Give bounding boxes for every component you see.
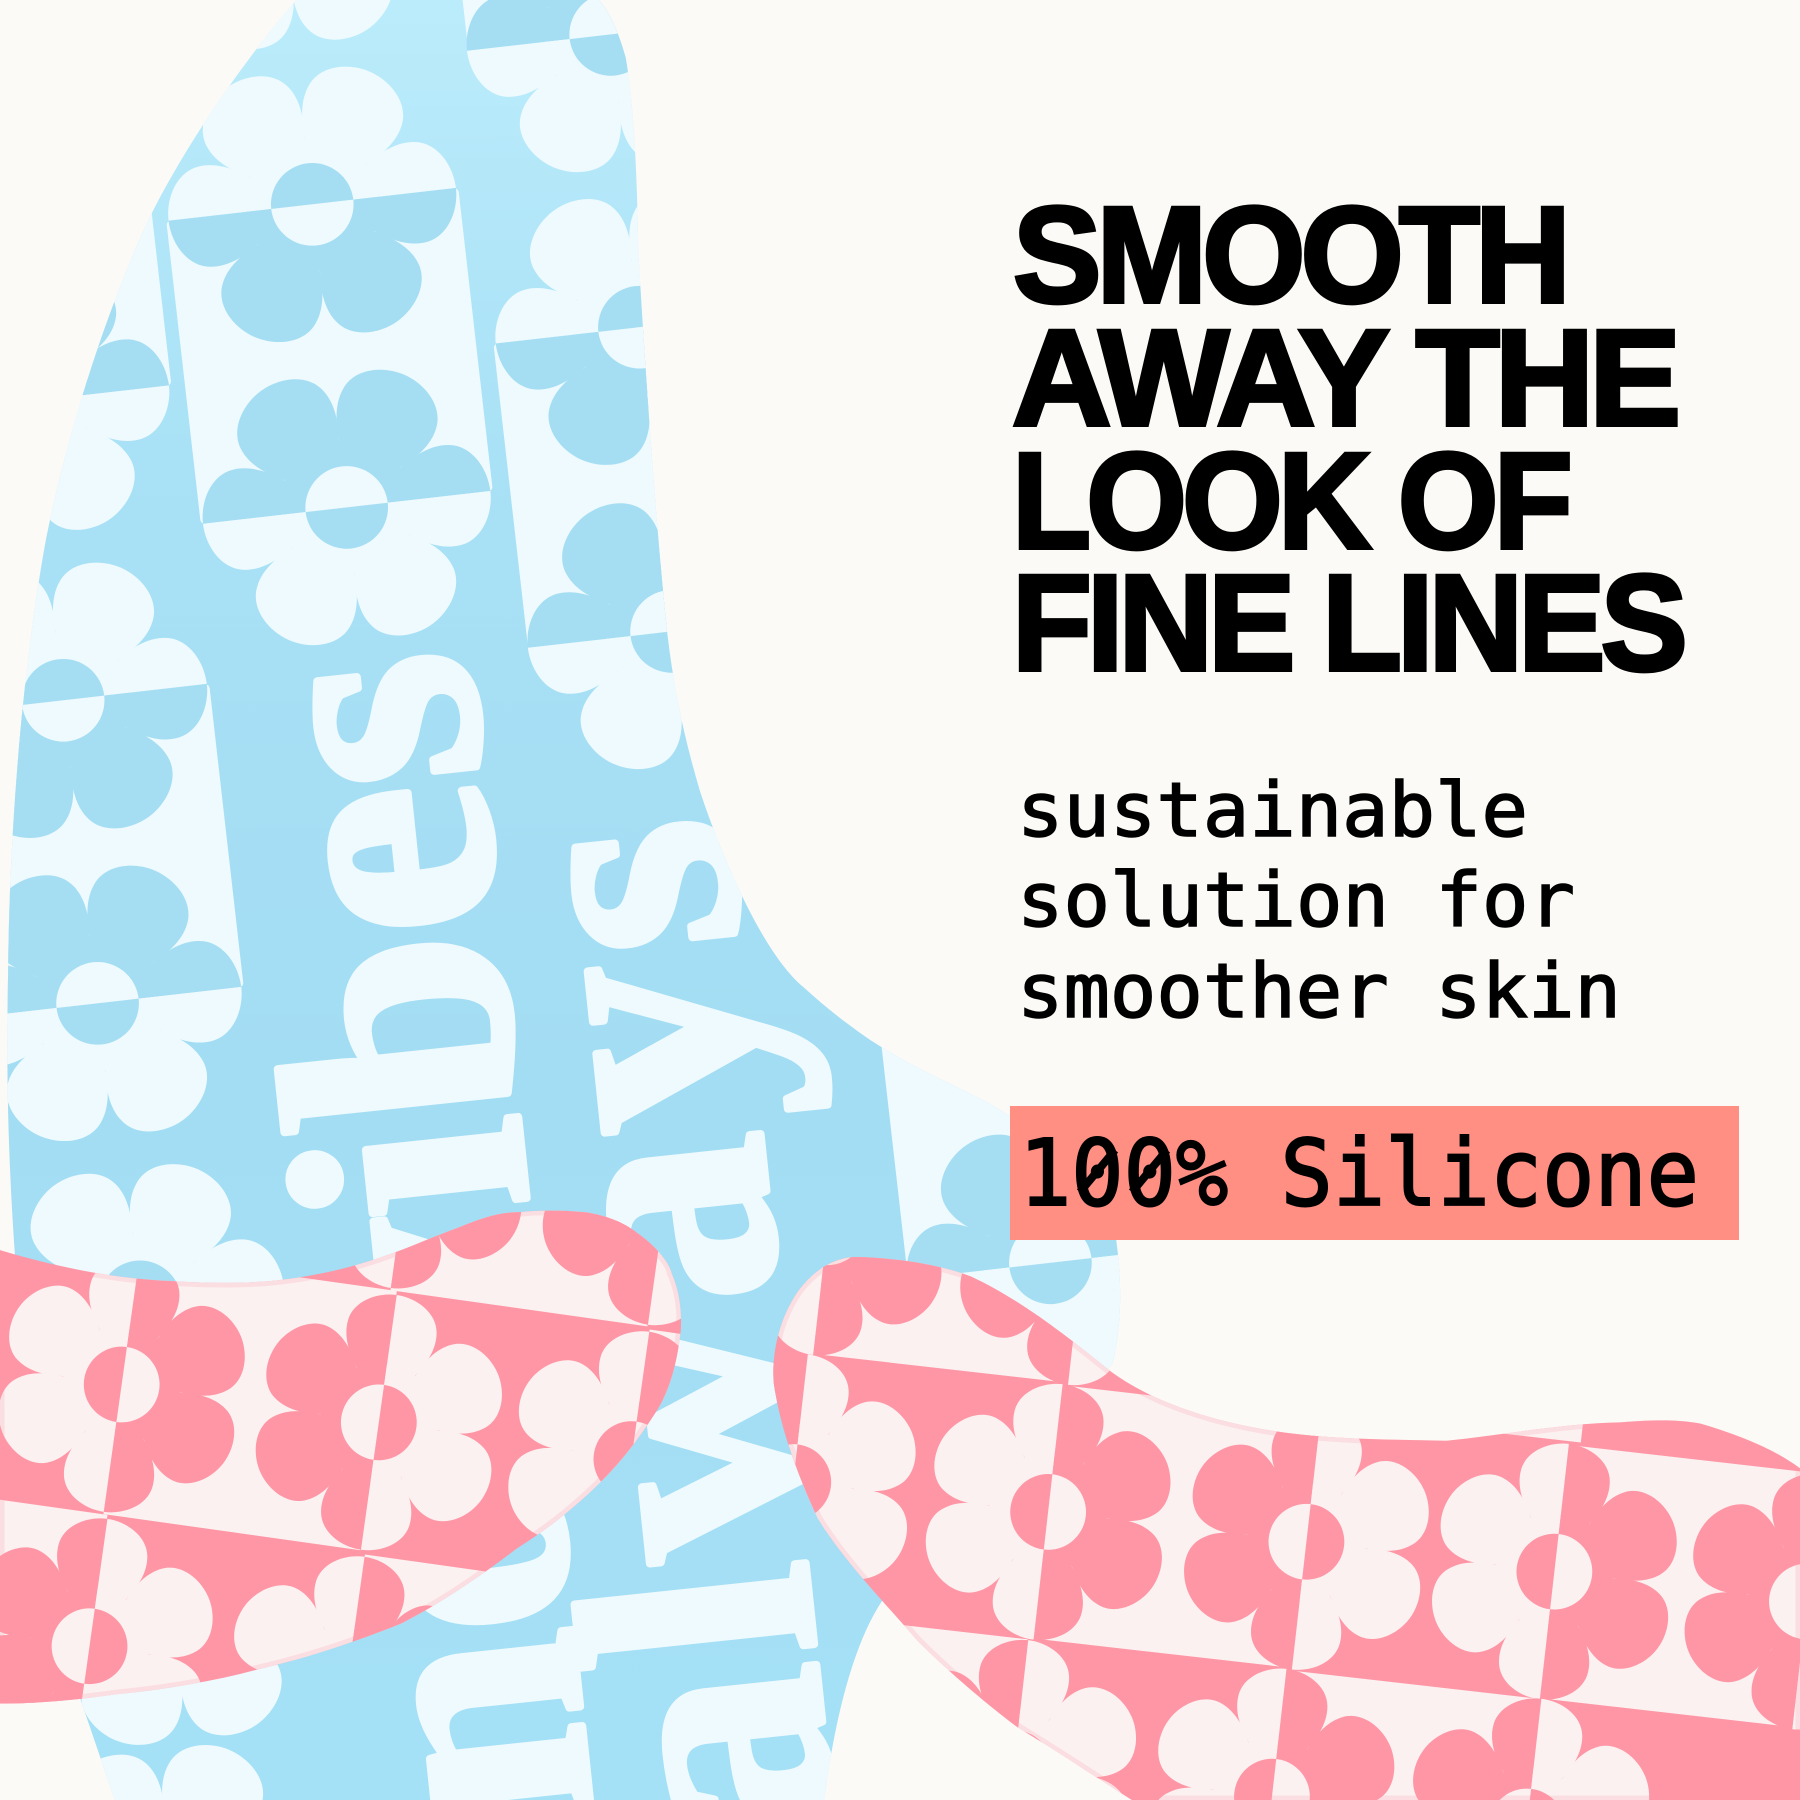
panel: left pink patch: [0, 1210, 681, 1704]
panel: right pink patch: [773, 1257, 1800, 1800]
subtitle text block: solution for: [1017, 856, 1575, 944]
flowers on blue patch: [0, 0, 1211, 1800]
title: SMOOTH: [1013, 179, 1566, 332]
title: LOOK OF: [1012, 425, 1568, 578]
flowers on right pink patch: [773, 1257, 1800, 1800]
flowers on left pink patch: [0, 1210, 681, 1704]
panel: blue patch: [0, 0, 1211, 1800]
title: FINE LINES: [1012, 547, 1684, 700]
callout: 100% Silicone: 100% Silicone: [1019, 1120, 1699, 1227]
subtitle text block: [1017, 766, 1621, 1035]
title: AWAY THE: [1012, 302, 1677, 455]
title: [1012, 179, 1684, 700]
subtitle text block: smoother skin: [1017, 947, 1621, 1035]
subtitle text block: sustainable: [1017, 766, 1528, 854]
